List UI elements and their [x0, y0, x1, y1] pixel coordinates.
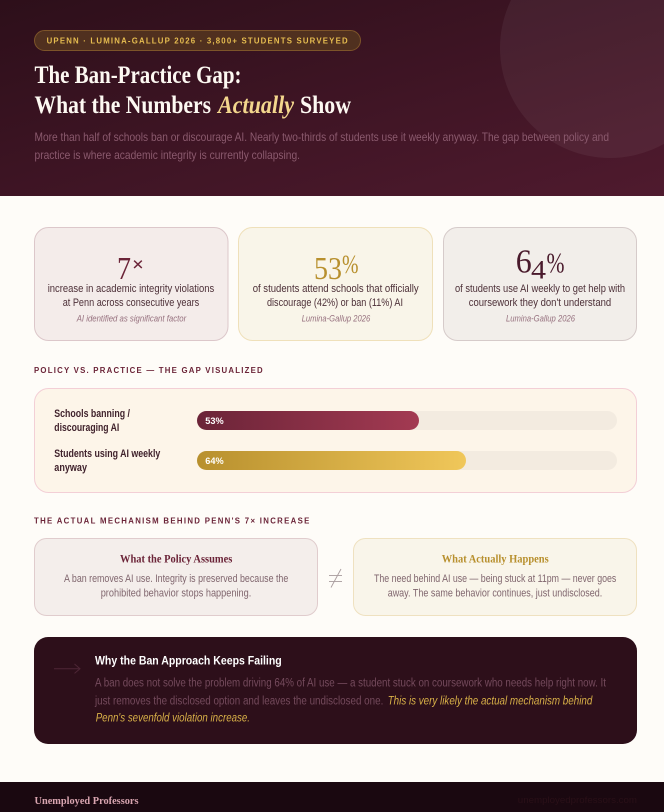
panel: what the policy assumes: A ban removes AI use. Integrity is preserved because the [64, 573, 288, 585]
callout: why the ban keeps failing: just removes the disclosed option and leaves the undisclosed one. [94, 696, 383, 708]
stat card: 7x [34, 228, 228, 340]
callout: why the ban keeps failing: This is very likely the actual mechanism behind [388, 696, 593, 708]
panel: what the policy assumes: prohibited behavior stops happening. [101, 588, 251, 600]
stat card: 53% [238, 228, 432, 340]
stat card: 53%: of students attend schools that officially [253, 283, 419, 295]
stat card: 7x: increase in academic integrity violations [48, 283, 215, 295]
stat card: 64%: coursework they don't understand [469, 297, 611, 309]
footer: unemployedprofessors.com [518, 795, 637, 806]
title: Actually [216, 92, 295, 119]
footer: Unemployed Professors [34, 795, 139, 807]
icon: not equal sign [329, 569, 342, 588]
bar row: students using AI: anyway [54, 462, 88, 474]
panel: what actually happens: What Actually Happens [442, 554, 549, 566]
icon: arrow [54, 664, 80, 673]
panel: what the policy assumes [34, 538, 318, 616]
bar row: students using AI: Students using AI weekly [54, 448, 161, 460]
source pill [34, 30, 360, 50]
stat card: 64% [444, 228, 636, 340]
stat card: 64%: % [546, 248, 564, 280]
stat card: 64%: 4 [531, 256, 546, 284]
bar row: schools banning: discouraging AI [54, 422, 119, 434]
callout: why the ban keeps failing: Penn's sevenfold violation increase. [96, 713, 250, 725]
subtitle: practice is where academic integrity is currently collapsing. [34, 148, 300, 162]
stat card: 53%: 53 [314, 250, 342, 286]
stat card: 64%: Lumina-Gallup 2026 [506, 314, 575, 324]
callout: why the ban keeps failing: Why the Ban Approach Keeps Failing [95, 654, 282, 668]
subtitle [34, 130, 609, 162]
panel: gap bar chart [34, 388, 636, 492]
stat card: 53%: discourage (42%) or ban (11%) AI [267, 297, 403, 309]
panel: what the policy assumes: What the Policy Assumes [120, 554, 233, 566]
title [34, 62, 351, 119]
stat card: 53%: % [342, 250, 358, 279]
title: What the Numbers [34, 92, 211, 119]
title: The Ban-Practice Gap: [34, 62, 242, 89]
callout: why the ban keeps failing [34, 637, 637, 744]
section heading: policy vs practice: POLICY VS. PRACTICE — THE GAP VISUALIZED [34, 366, 263, 375]
stat card: 53%: Lumina-Gallup 2026 [302, 314, 370, 324]
bar row: schools banning: 53% [205, 416, 224, 427]
bar row: schools banning [54, 408, 617, 434]
bar row: schools banning: Schools banning / [54, 408, 130, 420]
stat card: 7x: at Penn across consecutive years [63, 297, 200, 309]
source pill: UPENN · LUMINA-GALLUP 2026 · 3,800+ STUDENTS SURVEYED [47, 37, 348, 46]
stat card: 7x: 7 [117, 250, 131, 286]
footer [0, 782, 664, 812]
panel: what actually happens: away. The same behavior continues, just undisclosed. [388, 588, 602, 600]
bar row: students using AI [54, 448, 617, 474]
stat card: 7x: AI identified as significant factor [76, 314, 187, 324]
title: Show [300, 92, 351, 119]
header banner [0, 0, 664, 196]
section heading: actual mechanism: THE ACTUAL MECHANISM BEHIND PENN'S 7× INCREASE [34, 516, 309, 525]
bar row: students using AI: 64% [205, 456, 224, 467]
stat card: 64%: of students use AI weekly to get help with [455, 283, 625, 295]
panel: what actually happens [354, 538, 636, 616]
stat card: 64%: 6 [516, 244, 532, 280]
stat card: 7x: × [132, 254, 144, 276]
